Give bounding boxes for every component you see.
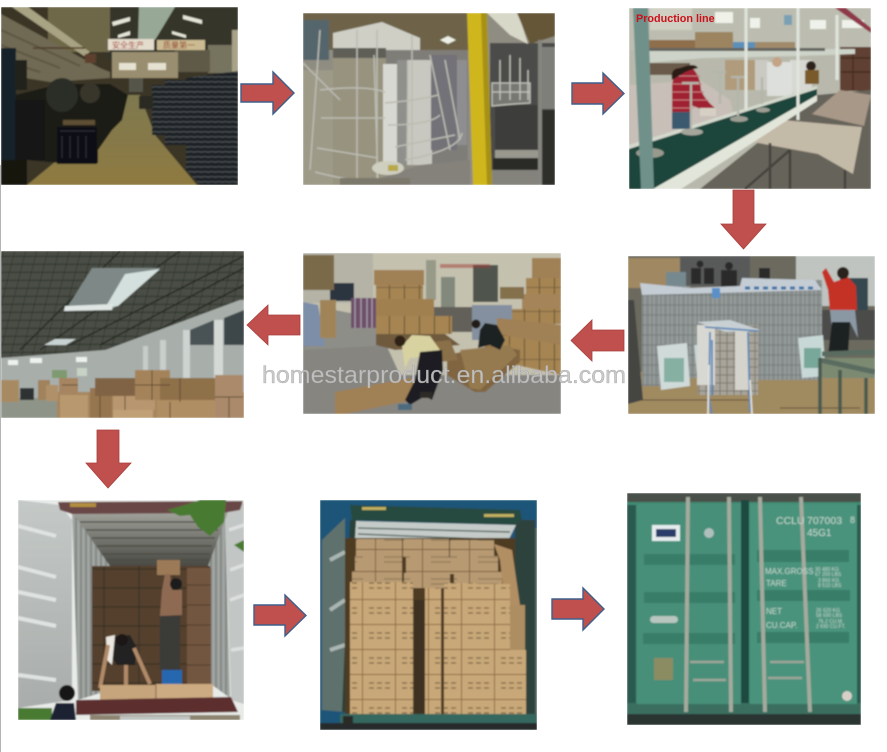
- panel: finished goods warehouse photo: [1, 251, 244, 418]
- container markings: 67 200 LBS: [815, 572, 842, 578]
- dark post: [1, 48, 16, 185]
- door panels light: [637, 504, 857, 704]
- container markings: TARE: [766, 579, 787, 588]
- cloth covered tables: [745, 90, 871, 189]
- green rack foreground: [820, 352, 875, 414]
- skylights: [44, 268, 160, 345]
- product line caption: Production line: [636, 13, 715, 25]
- conveyor belt: [629, 86, 817, 189]
- front carton columns: [350, 582, 526, 718]
- container markings: 26 620 KG: [816, 608, 840, 614]
- mid area: [645, 63, 690, 75]
- left container door: [18, 500, 72, 708]
- panel: container loading photo: [18, 500, 244, 720]
- back wall: [303, 253, 503, 332]
- arrow: step 8 to 9: [552, 588, 604, 630]
- panel: powder coating booth photo: [303, 13, 555, 185]
- corrugated ceiling: [72, 512, 228, 566]
- product cartons: [657, 335, 826, 390]
- floor: [303, 315, 561, 414]
- watermark: homestarproduct.en.alibaba.com: [262, 362, 626, 389]
- container markings: 2 690 CU.FT.: [816, 624, 845, 630]
- green pillar: [633, 8, 654, 189]
- container markings: 707003: [807, 515, 842, 527]
- right booth: [487, 13, 555, 185]
- worker on stool: [157, 560, 182, 689]
- right carton stacks: [485, 258, 561, 375]
- panel: sealed green container photo: [627, 493, 861, 725]
- container edges: [627, 493, 861, 725]
- container markings: [765, 515, 855, 630]
- panel: metal stamping workshop photo: [1, 7, 238, 185]
- right container door: [225, 503, 244, 704]
- bystander: [50, 685, 76, 720]
- door recess bands: [643, 550, 850, 644]
- page edge line: [0, 165, 1, 752]
- arrow: step 3 to 4: [721, 190, 766, 249]
- cartons on sill: [100, 684, 213, 702]
- dark left rack: [628, 300, 643, 404]
- arrow: step 2 to 3: [572, 73, 624, 114]
- arrow: step 4 to 5: [571, 320, 624, 361]
- arrow: step 6 to 7: [86, 430, 131, 488]
- upper shelf: [645, 49, 855, 63]
- ceiling: [303, 13, 470, 50]
- container frame: [350, 505, 522, 525]
- back wall and windows: [629, 8, 871, 50]
- container markings: CCLU: [776, 515, 805, 527]
- floor and pails: [360, 160, 470, 185]
- container markings: 30 480 KG: [815, 567, 839, 573]
- arrow: step 5 to 6: [247, 305, 300, 345]
- container markings: 8: [850, 515, 855, 525]
- hanging wire baskets: [300, 30, 462, 185]
- yellow column: [467, 13, 492, 185]
- carton piles: [1, 370, 244, 418]
- seal and plates: [704, 528, 714, 538]
- side wall and columns: [1, 300, 244, 395]
- arrow: step 1 to 2: [241, 72, 294, 114]
- front airer: [697, 320, 760, 414]
- arrow: step 7 to 8: [254, 595, 306, 636]
- boxes being packed: [405, 340, 520, 392]
- container markings: NET: [766, 607, 782, 616]
- top carton rows: [352, 539, 520, 605]
- factory banners: 质量第一: [163, 40, 195, 50]
- back of hall: [628, 256, 875, 340]
- machines: [15, 78, 128, 164]
- foliage: [18, 500, 244, 720]
- bottom sill: [320, 714, 537, 730]
- red shirt worker: [822, 267, 858, 355]
- panel: carton packing photo: [303, 253, 561, 414]
- back wall: [112, 52, 178, 78]
- container markings: 45G1: [807, 528, 832, 539]
- background workers: [691, 260, 770, 292]
- container markings: CU.CAP.: [766, 621, 797, 630]
- racks in background: [303, 298, 512, 346]
- cartons inside container: [92, 566, 210, 691]
- shelf boxes: [645, 32, 871, 91]
- stacked wire frames: [139, 71, 238, 185]
- second worker: [767, 57, 819, 96]
- container markings: 8 510 LBS: [818, 583, 842, 589]
- crouching worker: [472, 320, 505, 350]
- wrapped airers stack: [640, 278, 822, 386]
- bending worker: [100, 634, 150, 688]
- warehouse floor: [1, 398, 63, 418]
- container markings: 3 860 KG: [818, 578, 839, 584]
- container markings: MAX.GROSS: [765, 567, 813, 576]
- floor: [27, 95, 197, 185]
- bending worker: [394, 335, 443, 410]
- factory banners: [108, 39, 205, 50]
- container interior walls: [72, 512, 110, 700]
- container markings: 58 690 LBS: [816, 613, 843, 619]
- container doors at sides: [322, 518, 537, 720]
- workshop roof and skylight: [12, 7, 238, 73]
- female worker: [672, 65, 716, 129]
- container sill: [76, 697, 240, 720]
- stone wall: [1, 14, 110, 82]
- panel: production line photo: [629, 8, 871, 189]
- locking rods: [686, 497, 810, 712]
- main carton stack: [374, 270, 460, 350]
- front carton: [335, 378, 425, 414]
- floor and tables: [700, 90, 871, 189]
- door handles: [690, 662, 804, 680]
- dark backing: [342, 520, 356, 712]
- factory banners: 安全生产: [112, 40, 144, 50]
- container markings: 76.2 CU.M.: [818, 619, 843, 625]
- shelf uprights: [746, 8, 837, 120]
- panel: wrapped airers photo: [628, 256, 875, 414]
- container top rail: [58, 501, 243, 514]
- roof panel: [355, 521, 516, 545]
- logo plate: [652, 525, 680, 541]
- warehouse floor: [628, 372, 875, 414]
- white coating booth: [303, 22, 468, 185]
- steel roof: [1, 251, 244, 358]
- panel: full container photo: [320, 500, 537, 730]
- product stands on belt: [682, 72, 762, 132]
